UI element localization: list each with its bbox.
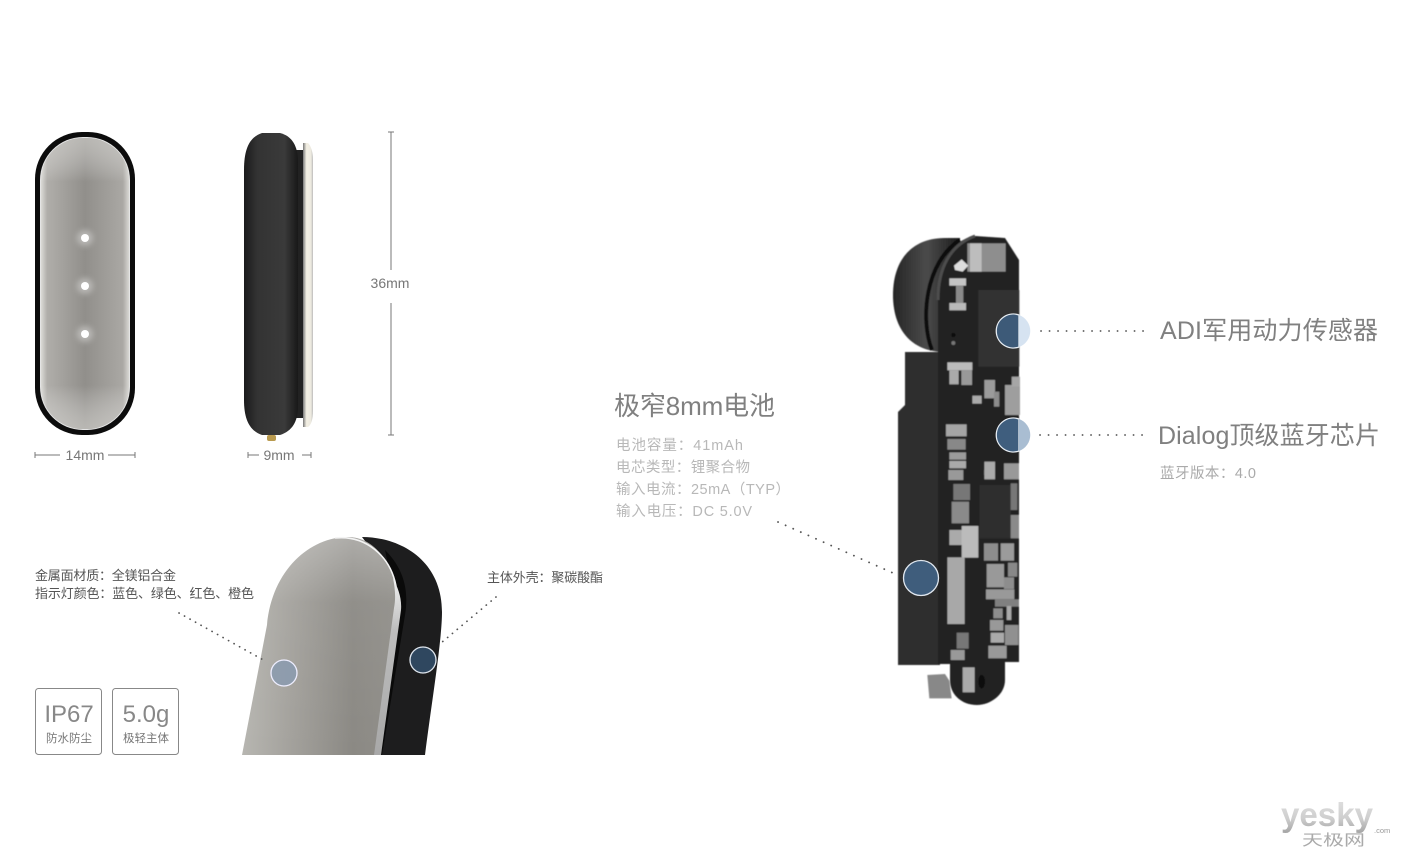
height dimension: 36mm (371, 132, 409, 435)
watermark: yesky: yesky (1281, 796, 1374, 833)
callout: metal face (179, 613, 297, 686)
thickness dimension: 9mm (248, 447, 311, 463)
battery specification list: 输入电压：DC 5.0V (616, 503, 752, 520)
callout: Dialog chip (996, 418, 1148, 452)
Bluetooth version: 蓝牙版本：4.0 (1160, 465, 1256, 482)
Bluetooth chip label: Dialog顶级蓝牙芯片 (1158, 422, 1380, 450)
badge: 5.0g (112, 688, 178, 754)
main board (938, 236, 1019, 705)
front view of device (35, 132, 135, 435)
battery (898, 352, 940, 665)
callout: shell (410, 597, 496, 673)
battery heading: 极窄8mm电池 (614, 391, 775, 421)
material specification text (35, 568, 254, 601)
thickness dimension: 9mm: 9mm (263, 447, 295, 463)
shell specification text: 主体外壳：聚碳酸酯 (487, 570, 603, 585)
battery specification list: 输入电流：25mA（TYP） (616, 481, 790, 498)
badge: IP67: IP67 (44, 701, 94, 728)
callout: ADI sensor (996, 314, 1150, 348)
badge: 5.0g: 5.0g (123, 701, 169, 728)
width dimension: 14mm (35, 447, 135, 463)
battery specification list: 电池容量：41mAh (616, 437, 743, 454)
width dimension: 14mm: 14mm (66, 447, 104, 463)
circuit board and battery illustration (893, 236, 1020, 705)
wheel component (893, 238, 960, 352)
watermark: yesky: 天极网 (1302, 832, 1365, 849)
badge: IP67: 防水防尘 (46, 731, 92, 745)
badge: IP67 (36, 688, 102, 754)
indicator lights (77, 230, 93, 342)
close-up of device (242, 537, 442, 755)
watermark: yesky: .com (1374, 826, 1390, 835)
watermark: yesky (1281, 796, 1390, 849)
sensor label: ADI军用动力传感器 (1160, 317, 1378, 345)
material specification text: 金属面材质：全镁铝合金 (35, 568, 176, 583)
battery specification list: 电芯类型：锂聚合物 (616, 459, 750, 476)
side view of device (244, 133, 313, 441)
upper components (946, 243, 1020, 475)
callout: battery (778, 522, 938, 596)
battery specification list (616, 437, 790, 520)
badge: 5.0g: 极轻主体 (123, 731, 169, 745)
material specification text: 指示灯颜色：蓝色、绿色、红色、橙色 (35, 586, 254, 601)
height dimension: 36mm: 36mm (371, 275, 409, 291)
lower components (927, 470, 1019, 698)
